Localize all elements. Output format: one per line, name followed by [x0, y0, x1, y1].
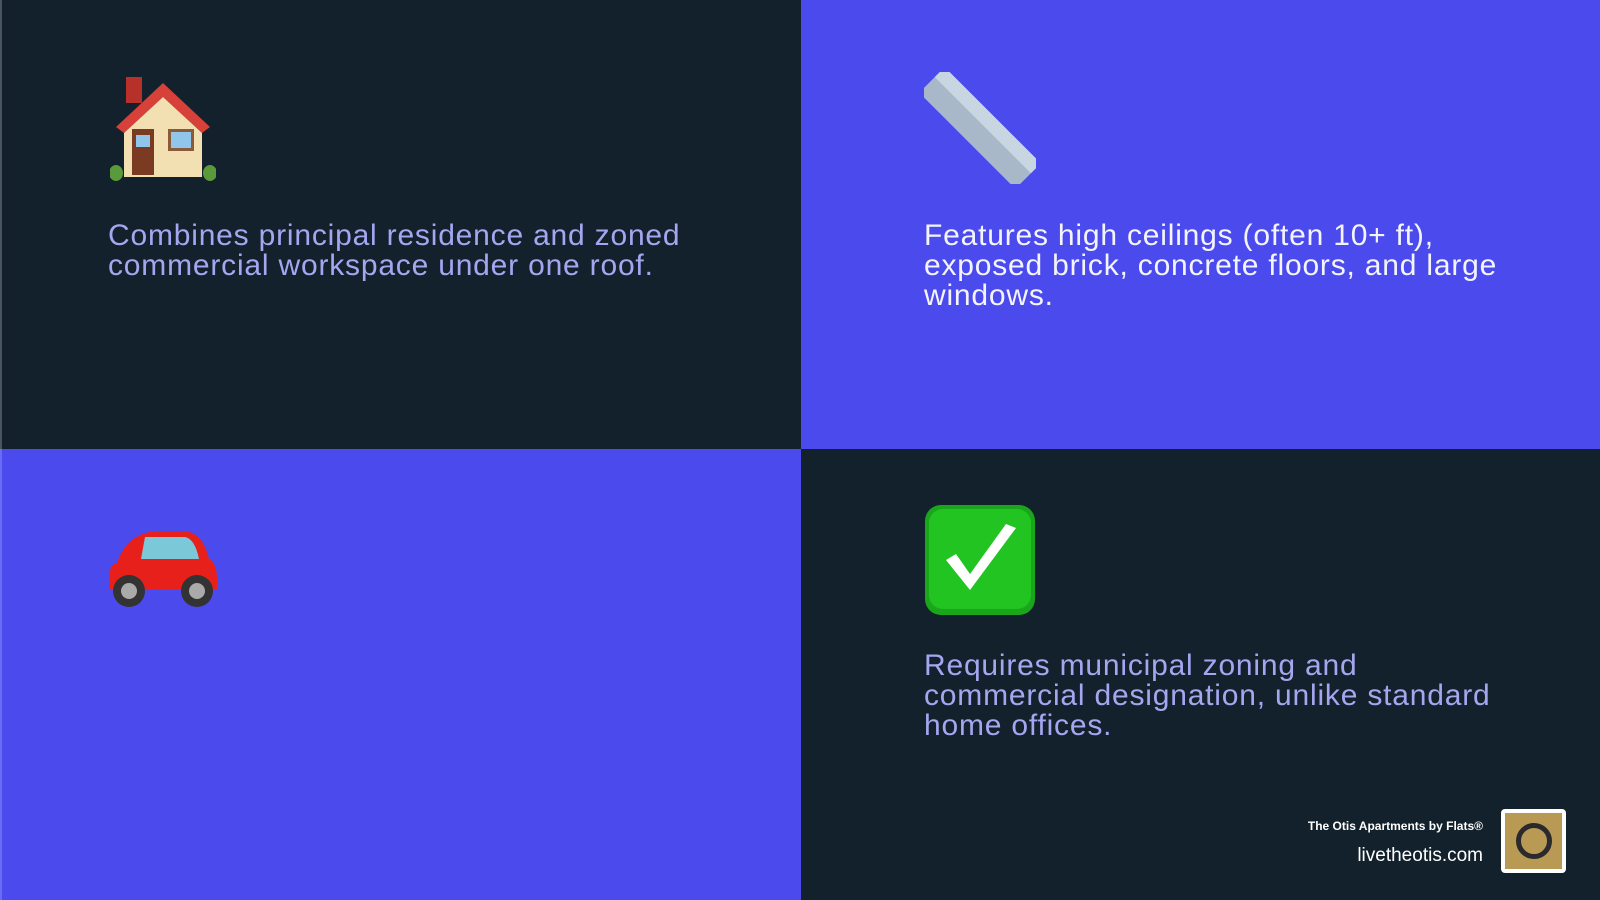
icon: car [109, 531, 217, 607]
logo [1501, 809, 1566, 873]
icon: check mark [925, 505, 1035, 615]
brand name: The Otis Apartments by Flats® [1308, 819, 1483, 833]
panel: top-left [0, 0, 801, 449]
text: top-left: Combines principal residence and zoned commercial workspace under one roof. [108, 219, 680, 282]
panel: bottom-left [0, 449, 801, 900]
text: top-right: Features high ceilings (often 10+ ft), exposed brick, concrete floors, and large windows. [924, 219, 1497, 312]
panel: top-right [801, 0, 1600, 449]
panel: bottom-right [801, 449, 1600, 900]
text: bottom-right: Requires municipal zoning and commercial designation, unlike standard home offices. [924, 649, 1490, 742]
brand block [1308, 809, 1566, 873]
icon: ruler [924, 72, 1036, 184]
icon: house [110, 77, 216, 181]
website: livetheotis.com [1357, 845, 1483, 866]
